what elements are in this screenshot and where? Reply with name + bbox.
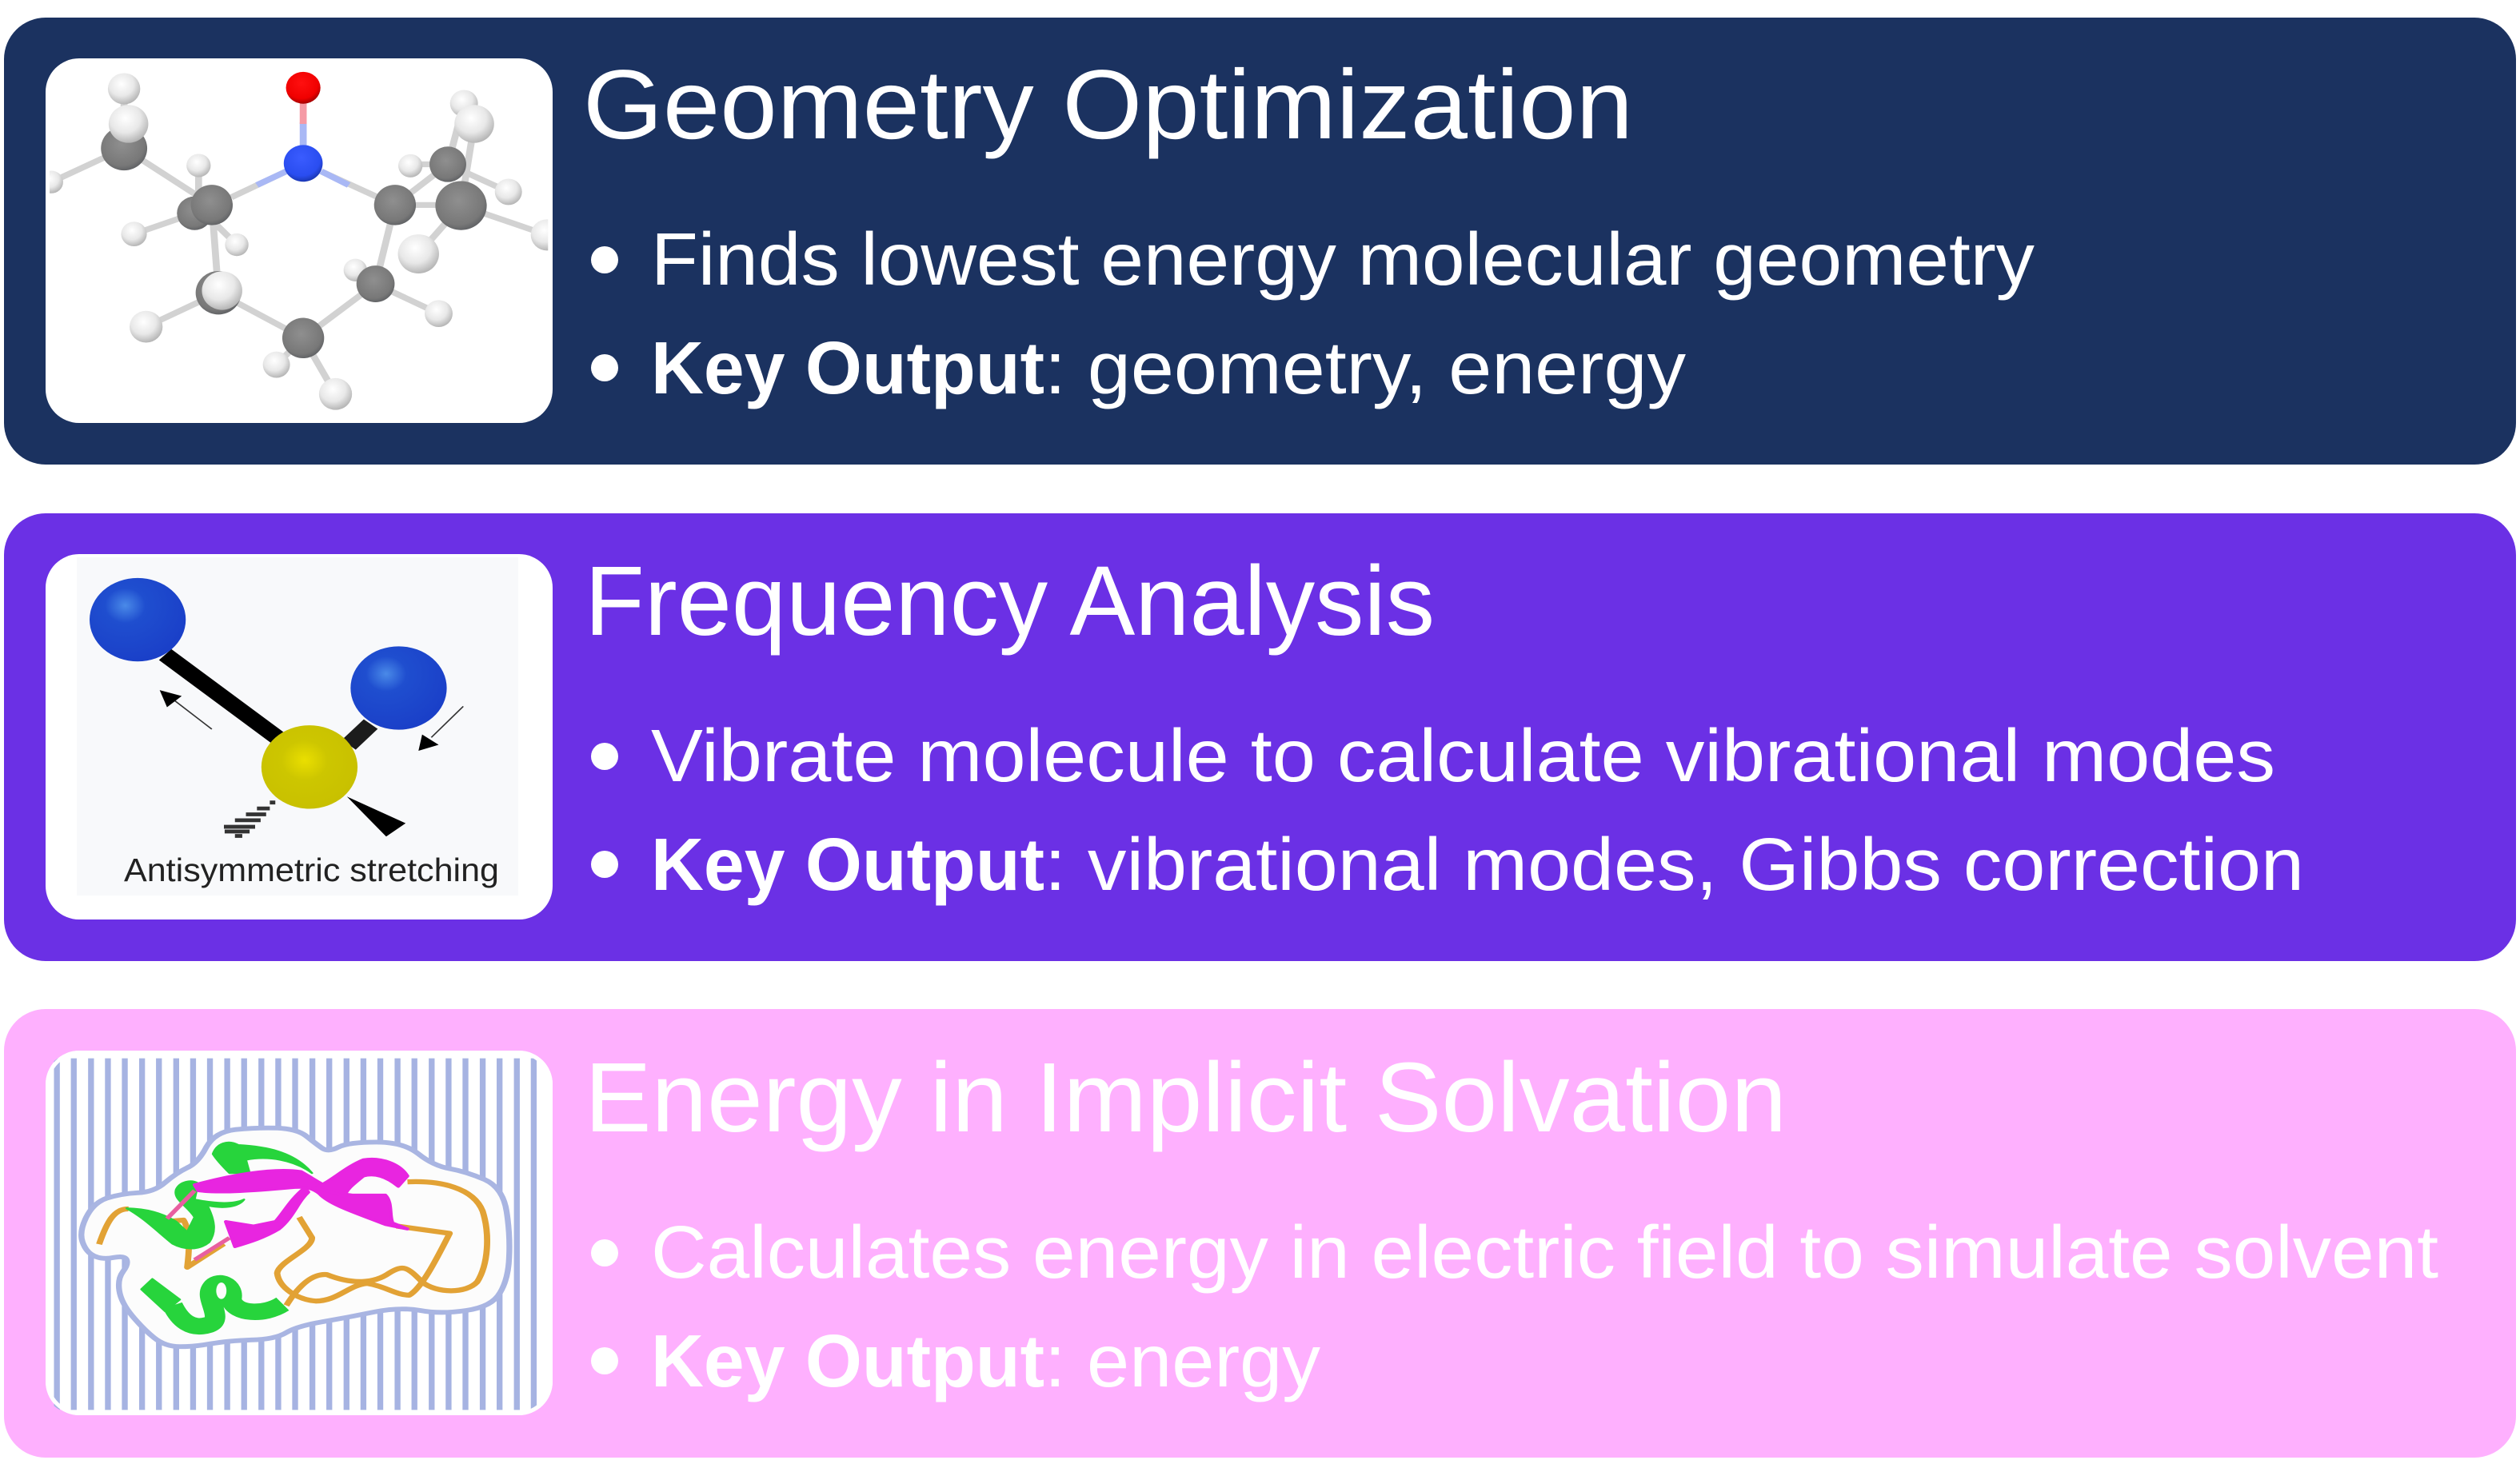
heading: Geometry Optimization: Geometry Optimization xyxy=(583,50,1633,160)
wedge bond xyxy=(347,796,405,836)
atoms: hydrogen and carbon xyxy=(40,73,563,410)
bullet: key output energy: : energy xyxy=(1044,1319,1321,1402)
bullet: key output vibrational modes: : vibrational modes, Gibbs correction xyxy=(1044,823,2304,906)
image card: antisymmetric stretching diagram xyxy=(46,554,553,919)
bullet: key output vibrational modes: Key Output xyxy=(651,823,1044,906)
panel: frequency analysis xyxy=(4,513,2516,961)
solvent cavity outline xyxy=(82,1128,509,1346)
heading: Frequency Analysis: Frequency Analysis xyxy=(585,547,1435,656)
arrow: right atom motion xyxy=(418,706,463,751)
panel: energy in implicit solvation xyxy=(4,1009,2516,1458)
atom: blue left xyxy=(90,578,186,661)
bullet: key output energy xyxy=(591,1319,1321,1402)
protein: green helices xyxy=(126,1143,312,1326)
image card: molecule ball-and-stick model xyxy=(40,58,563,423)
bullet: key output geometry, energy: : geometry, energy xyxy=(1044,326,1687,409)
bullet: finds lowest energy geometry: Finds lowest energy molecular geometry xyxy=(651,217,2035,301)
bullet: key output geometry, energy xyxy=(591,326,1687,409)
protein: orange loops xyxy=(99,1182,487,1306)
panel: geometry optimization xyxy=(4,18,2516,465)
atom: yellow centre xyxy=(262,725,357,808)
image card: protein in implicit solvent xyxy=(46,1051,553,1415)
bullet: vibrate molecule: Vibrate molecule to calculate vibrational modes xyxy=(651,714,2275,797)
bullet: key output geometry, energy: Key Output xyxy=(651,326,1044,409)
atom: oxygen xyxy=(286,72,321,104)
atom: blue right xyxy=(350,646,447,730)
heading: Energy in Implicit Solvation: Energy in Implicit Solvation xyxy=(585,1043,1787,1153)
bullet: calculates energy in electric field: Calculates energy in electric field to simulate solvent xyxy=(651,1211,2438,1294)
arrow: left atom motion xyxy=(160,690,212,729)
solvent stripes xyxy=(57,1059,533,1410)
atom: nitrogen xyxy=(284,145,322,182)
bullet: key output energy: Key Output xyxy=(651,1319,1044,1402)
image caption: Antisymmetric stretching xyxy=(124,852,499,888)
hashed bond xyxy=(224,803,275,836)
protein: magenta sheets xyxy=(167,1159,407,1260)
